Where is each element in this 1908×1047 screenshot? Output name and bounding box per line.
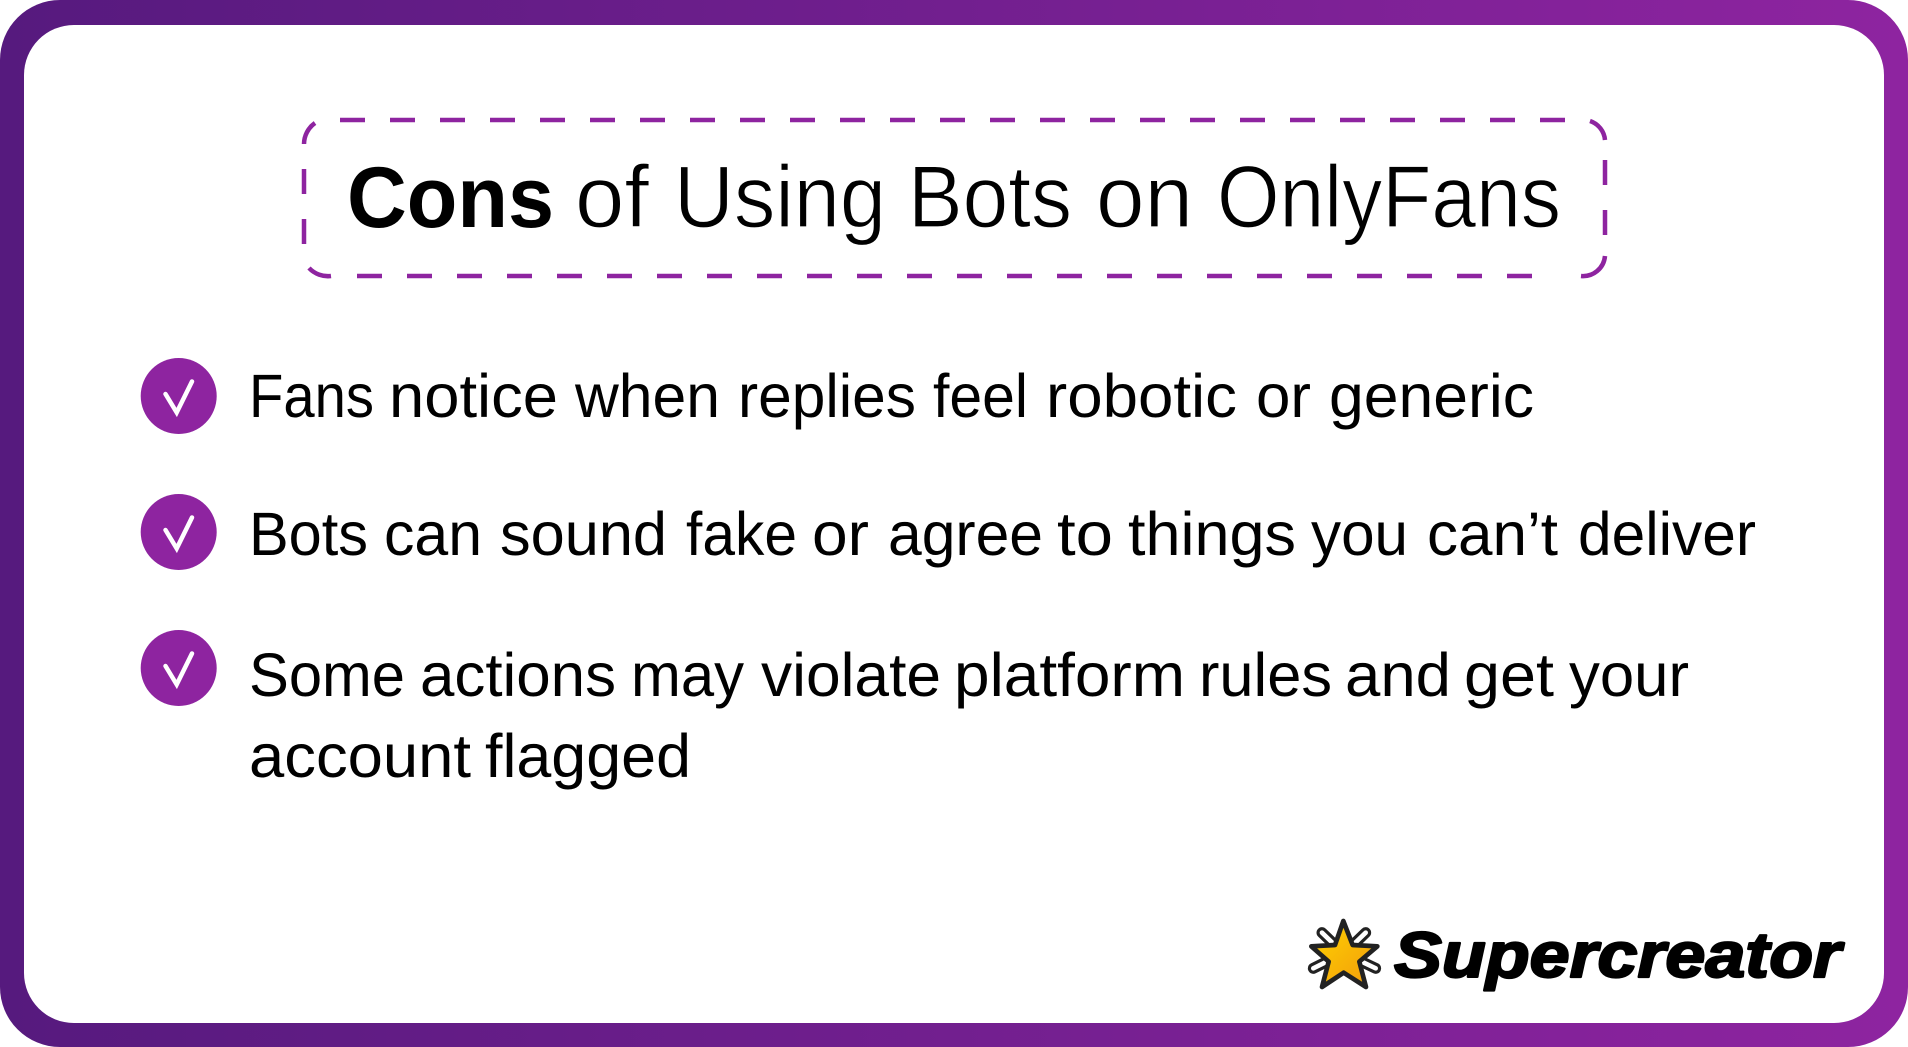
text: fans notice: Fans [249, 362, 374, 430]
text: fans notice [249, 362, 1534, 430]
title box [304, 120, 1605, 276]
title: Cons [347, 150, 554, 246]
logo wordmark: Supercreator [1394, 919, 1844, 991]
text: platform rules [249, 641, 1689, 790]
icon: star [1311, 921, 1377, 987]
text: platform rules: rules [1199, 641, 1332, 709]
text: fans notice: replies [738, 362, 916, 430]
text: platform rules: your [1569, 641, 1689, 709]
text: bots sound fake: deliver [1578, 500, 1756, 568]
text: bots sound fake: Bots [249, 500, 368, 568]
list item 3 [141, 630, 1689, 790]
text: bots sound fake: things [1128, 500, 1296, 568]
text: platform rules: may [631, 641, 744, 709]
text: platform rules: platform [954, 641, 1185, 709]
icon: check badge [141, 630, 217, 706]
title: Using [674, 147, 886, 246]
text: fans notice: feel [933, 362, 1028, 430]
text: platform rules: account [249, 722, 471, 790]
text: bots sound fake: sound [500, 500, 667, 568]
title: of [575, 147, 650, 246]
list item 1 [141, 358, 1534, 434]
text: bots sound fake: can’t [1427, 500, 1558, 568]
text: fans notice: when [574, 362, 720, 430]
title: on [1096, 147, 1193, 246]
icon: check badge [141, 494, 217, 570]
text: platform rules: and [1345, 641, 1451, 709]
text: bots sound fake: you [1311, 500, 1408, 568]
text: bots sound fake: can [384, 500, 482, 568]
text: bots sound fake: or [812, 500, 869, 568]
text: bots sound fake: agree [888, 500, 1043, 568]
logo: Supercreator [1311, 919, 1844, 991]
text: bots sound fake [249, 500, 1756, 568]
text: fans notice: robotic [1046, 362, 1237, 430]
title [347, 147, 1561, 246]
text: platform rules: Some [249, 641, 405, 709]
text: fans notice: generic [1329, 362, 1534, 430]
text: platform rules: get [1464, 641, 1554, 709]
list item 2 [141, 494, 1756, 570]
title: OnlyFans [1217, 147, 1561, 246]
text: platform rules: violate [761, 641, 941, 709]
text: platform rules: actions [420, 641, 616, 709]
text: bots sound fake: to [1057, 500, 1113, 568]
text: platform rules: flagged [485, 722, 691, 790]
icon: check badge [141, 358, 217, 434]
text: fans notice: or [1256, 362, 1311, 430]
text: fans notice: notice [389, 362, 558, 430]
text: bots sound fake: fake [686, 500, 797, 568]
title: Bots [908, 147, 1072, 246]
